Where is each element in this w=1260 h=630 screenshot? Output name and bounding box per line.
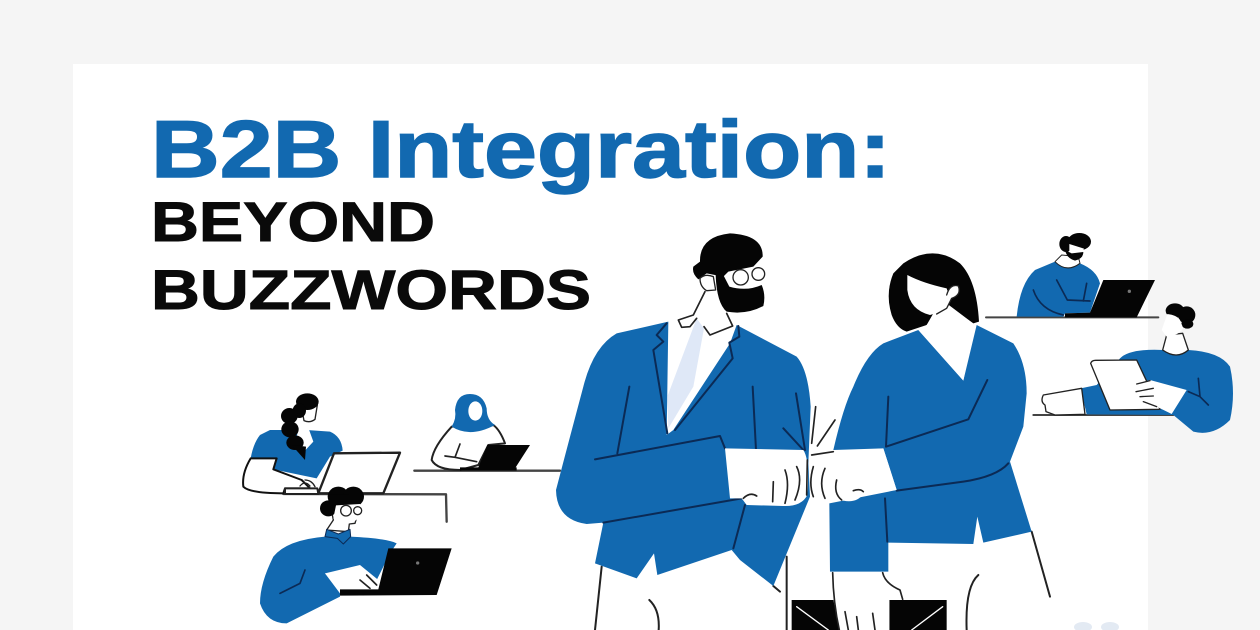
subtitle: beyond buzzwords: BEYOND bbox=[151, 190, 435, 253]
man with glasses: hand bbox=[325, 565, 378, 590]
laptop dot bbox=[416, 561, 419, 565]
man with glasses: body bbox=[260, 537, 397, 623]
envelope bbox=[792, 573, 947, 630]
subtitle: beyond buzzwords: BUZZWORDS bbox=[151, 258, 591, 321]
title: B2B Integration: B2B Integration: bbox=[151, 105, 891, 195]
envelope: right part bbox=[889, 600, 947, 630]
woman with braid: head bbox=[302, 405, 317, 422]
seated man: neck bbox=[1163, 333, 1188, 355]
woman: seams bbox=[885, 380, 1008, 542]
seated man: left hand bbox=[1042, 388, 1085, 415]
woman: hand holding envelope bbox=[833, 573, 903, 630]
seated man: finger lines bbox=[1136, 381, 1157, 407]
man: finger lines bbox=[743, 460, 807, 503]
man: neck and collar bbox=[678, 292, 733, 335]
man: beard bbox=[716, 275, 764, 313]
seated man: hair bbox=[1166, 303, 1195, 329]
woman with braid: neck bbox=[297, 420, 315, 451]
seated man: body bbox=[1081, 350, 1233, 433]
woman: finger lines bbox=[811, 452, 863, 500]
bearded man: hair bbox=[1059, 233, 1091, 252]
woman: hair bbox=[889, 253, 979, 332]
hand outlines bbox=[833, 573, 903, 630]
seated man: sleeve seam bbox=[1188, 378, 1208, 405]
seated man: right hand bbox=[1137, 380, 1187, 414]
woman in hijab: arm lines bbox=[445, 444, 477, 462]
bearded man: laptop bbox=[1065, 280, 1155, 317]
seated man: face bbox=[1162, 314, 1183, 337]
impact lines bbox=[812, 407, 835, 446]
woman with braid: hair bbox=[281, 393, 319, 460]
bearded man: beard bbox=[1065, 250, 1083, 261]
man: legs bbox=[595, 557, 787, 630]
woman in hijab: face bbox=[468, 401, 482, 421]
woman with braid: arm bbox=[243, 458, 310, 493]
woman in hijab: headscarf bbox=[452, 394, 495, 432]
bearded man: arm seams bbox=[1033, 280, 1090, 315]
man with glasses: hair bbox=[320, 487, 364, 516]
woman: top bbox=[829, 325, 1032, 572]
man with glasses: glasses bbox=[341, 505, 362, 516]
bearded man: neck bbox=[1055, 255, 1080, 268]
seated man: table line bbox=[1033, 412, 1173, 418]
man: jacket bbox=[556, 322, 811, 586]
bearded man: body bbox=[1017, 262, 1100, 317]
man: hair bbox=[693, 233, 763, 279]
desk lines bbox=[283, 471, 560, 522]
seated man: tablet bbox=[1091, 360, 1160, 410]
woman: ear and neck bbox=[937, 286, 959, 314]
man: tie bbox=[667, 318, 704, 428]
woman in hijab: body bbox=[432, 425, 505, 470]
woman in hijab: laptop bbox=[460, 445, 530, 471]
woman: legs bbox=[966, 532, 1050, 630]
man: cuff and fist bbox=[725, 448, 808, 506]
man with glasses: face bbox=[333, 504, 360, 524]
man: jacket seams bbox=[595, 323, 805, 548]
faint shapes at bottom edge bbox=[1074, 622, 1119, 630]
illustration: left desk figures bbox=[243, 393, 560, 623]
illustration: man and woman fist bump bbox=[556, 233, 1050, 630]
woman: cuff and fist bbox=[810, 448, 897, 501]
woman: face bbox=[907, 275, 950, 315]
bearded man: face bbox=[1069, 244, 1084, 253]
woman: fingers bbox=[300, 480, 315, 487]
envelope: flap lines bbox=[797, 607, 943, 630]
white panel bbox=[73, 64, 1148, 630]
laptop outline bbox=[318, 453, 400, 493]
man with glasses: collar bbox=[325, 529, 351, 544]
laptop base bbox=[285, 488, 318, 494]
desk line top bbox=[986, 314, 1158, 320]
man with glasses: laptop bbox=[340, 548, 452, 596]
man with glasses: neck bbox=[327, 512, 358, 532]
woman with braid: shirt bbox=[251, 430, 343, 478]
woman: neck bbox=[918, 303, 974, 381]
man: ear bbox=[700, 275, 716, 291]
illustration: right desk figures bbox=[986, 233, 1233, 433]
man with glasses: finger lines bbox=[360, 575, 377, 588]
subtitle: beyond buzzwords bbox=[151, 190, 591, 321]
man: glasses bbox=[733, 268, 765, 285]
man with glasses: sleeve seam bbox=[280, 570, 305, 593]
envelope: left part bbox=[792, 600, 840, 630]
laptop dot bbox=[1128, 290, 1131, 293]
